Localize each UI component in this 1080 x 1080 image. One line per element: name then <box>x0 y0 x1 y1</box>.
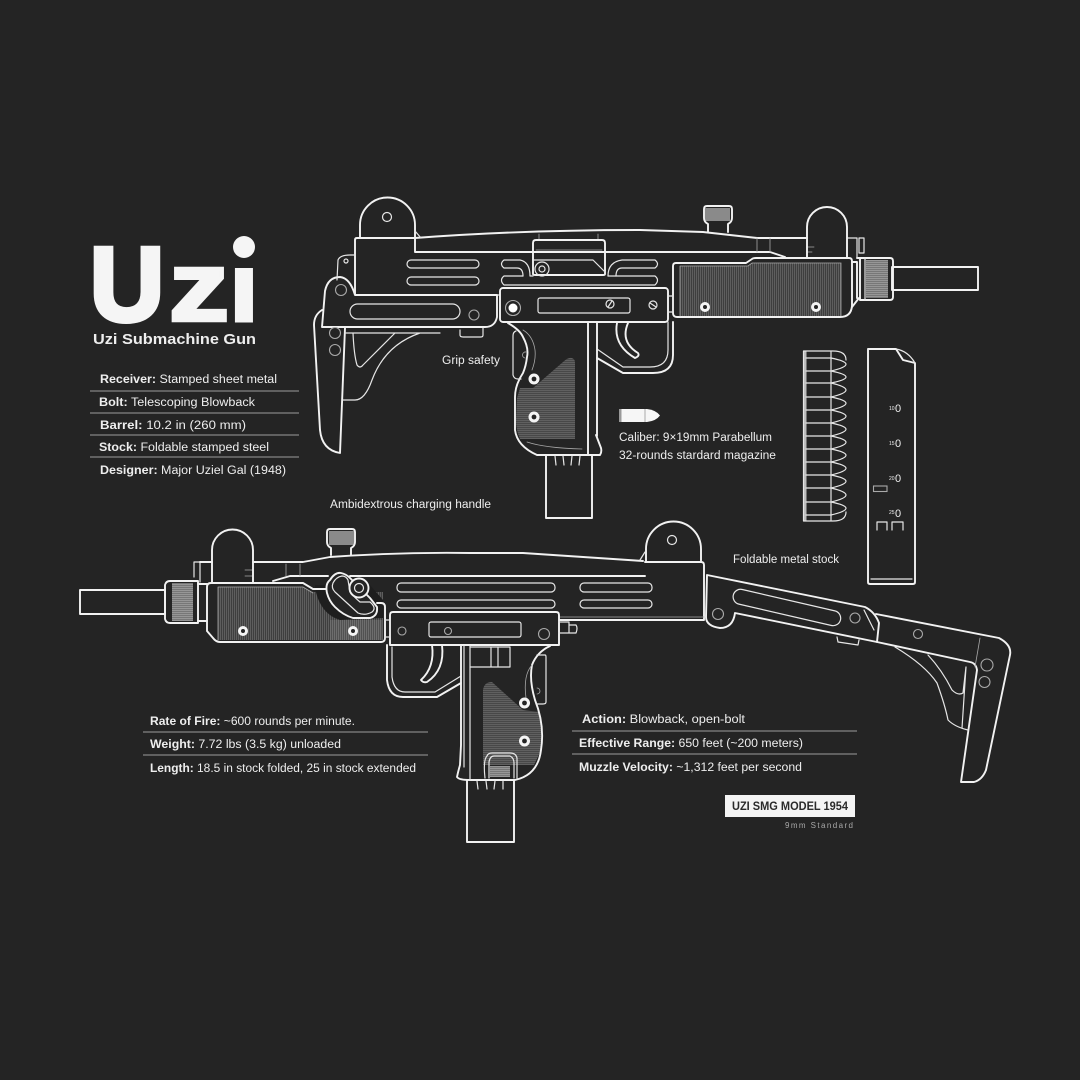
pistol grip <box>508 322 601 455</box>
magazine: cartridge stack view <box>804 351 846 521</box>
caliber note: 32-rounds stardard magazine <box>619 450 776 462</box>
trigger guard <box>387 645 461 697</box>
top gun: folded stock, right-facing <box>314 198 978 518</box>
trigger group frame <box>500 288 673 322</box>
magazine in grip <box>546 455 592 518</box>
spec list: performance right: Effective Range: 650 feet (~200 meters) <box>579 738 803 750</box>
grip safety label: Grip safety <box>442 355 500 367</box>
magazine: side view with round counters: 0 <box>895 473 901 485</box>
magazine release <box>484 753 517 778</box>
spec list: construction: Designer: Major Uziel Gal (1948) <box>100 465 286 477</box>
cooling slots <box>407 260 658 285</box>
rear sight ear <box>640 522 701 562</box>
model tag <box>725 795 855 817</box>
subtitle: Uzi Submachine Gun <box>93 331 256 348</box>
spec list: performance right: Action: Blowback, open-bolt <box>582 714 746 726</box>
icon: 9mm cartridge <box>619 409 660 422</box>
spec list: performance left <box>143 716 428 775</box>
front sight ear <box>807 207 847 258</box>
charging handle label: Ambidextrous charging handle <box>330 499 491 511</box>
top cover <box>200 553 645 581</box>
trigger group frame <box>385 612 577 645</box>
front sight post <box>704 206 732 232</box>
front sight post <box>327 529 355 555</box>
pistol grip <box>457 646 550 780</box>
extended folding stock <box>706 575 1010 782</box>
spec list: performance left: Rate of Fire: ~600 rounds per minute. <box>150 716 355 728</box>
spec list: construction: Receiver: Stamped sheet metal <box>100 374 277 386</box>
magazine: side view with round counters: 20 <box>889 476 895 482</box>
model tag: UZI SMG MODEL 1954 <box>732 801 849 813</box>
barrel <box>892 267 978 290</box>
spec list: construction <box>90 374 299 477</box>
magazine: side view with round counters <box>868 349 915 584</box>
model caliber caption: 9mm Standard <box>785 821 853 830</box>
rear sight ear <box>360 198 421 238</box>
magazine: side view with round counters: 0 <box>895 403 901 415</box>
upper receiver and top cover <box>355 230 814 295</box>
handguard <box>673 258 852 317</box>
charging handle cover <box>533 240 605 276</box>
spec list: performance right: Muzzle Velocity: ~1,312 feet per second <box>579 762 802 774</box>
spec list: construction: Bolt: Telescoping Blowback <box>99 397 255 409</box>
bottom gun: extended stock, left-facing <box>80 522 1010 842</box>
spec list: performance left: Weight: 7.72 lbs (3.5 kg) unloaded <box>150 739 341 751</box>
magazine: side view with round counters: 15 <box>889 441 895 447</box>
magazine: side view with round counters: 10 <box>889 406 895 412</box>
trigger guard <box>597 322 673 373</box>
magazine: side view with round counters: 0 <box>895 438 901 450</box>
spec list: performance left: Length: 18.5 in stock folded, 25 in stock extended <box>150 763 416 775</box>
front sight ear <box>212 530 253 582</box>
spec list: construction: Barrel: 10.2 in (260 mm) <box>100 420 246 432</box>
title: Uzi: z <box>169 232 229 342</box>
folding stock <box>314 255 497 453</box>
barrel nut <box>847 238 893 307</box>
spec list: construction: Stock: Foldable stamped steel <box>99 442 269 454</box>
caliber note: Caliber: 9×19mm Parabellum <box>619 432 772 444</box>
magazine in grip <box>467 780 514 842</box>
barrel nut <box>165 562 207 623</box>
magazine: side view with round counters: 25 <box>889 510 895 516</box>
handguard <box>207 583 385 642</box>
charging handle <box>326 573 377 618</box>
title: Uzi <box>90 226 260 344</box>
magazine: side view with round counters: 0 <box>895 508 901 520</box>
spec list: performance right <box>572 714 857 774</box>
receiver body and cooling slots <box>397 562 704 620</box>
foldable stock label: Foldable metal stock <box>733 554 839 566</box>
title: Uzi: i <box>229 229 259 343</box>
caliber note <box>619 432 776 462</box>
barrel <box>80 590 165 614</box>
title: Uzi: U <box>90 226 164 344</box>
